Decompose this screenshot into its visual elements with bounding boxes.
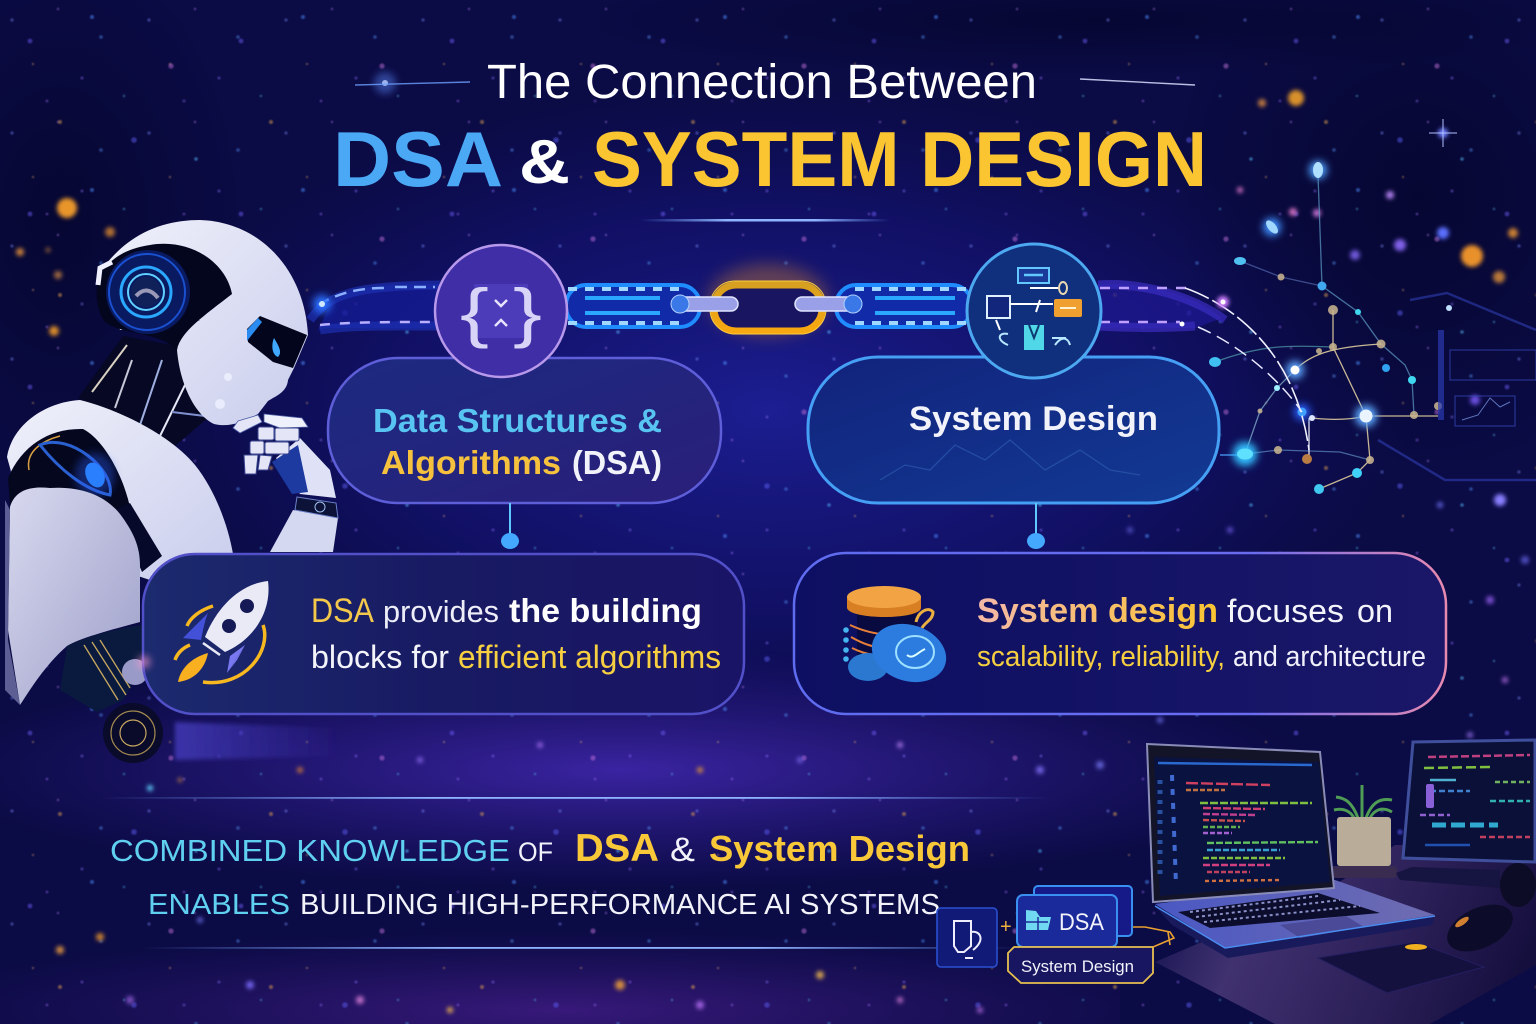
summary line 2: BUILDING HIGH-PERFORMANCE AI SYSTEMS [300, 889, 940, 921]
mini card: back card [1034, 886, 1132, 936]
mini card: System Design: System Design [1021, 957, 1134, 976]
title SYSTEM DESIGN: SYSTEM DESIGN [592, 115, 1207, 203]
summary text [110, 827, 970, 921]
DSA description line 2: efficient algorithms [458, 639, 721, 675]
desk and laptop scene [1147, 740, 1536, 1024]
DSA description line 1: the building [509, 592, 702, 629]
laptop screen [1147, 744, 1334, 902]
DSA description line 1 [311, 592, 702, 630]
DSA description line 2: blocks for [311, 639, 449, 675]
mini card: System Design [1008, 947, 1153, 983]
System Design description line 2: scalability, reliability, [977, 641, 1225, 673]
robot upper arm [8, 488, 140, 705]
second monitor [1396, 740, 1535, 888]
mini card: DSA [1017, 895, 1117, 947]
System Design label: System Design [909, 400, 1158, 438]
robot forearm [270, 510, 338, 552]
robot neck [78, 336, 210, 452]
robot [5, 220, 340, 763]
connector: System Design [1027, 503, 1045, 549]
panel: Data Structures and Algorithms [328, 358, 721, 503]
title ampersand: & [519, 128, 570, 197]
robot head [97, 220, 308, 425]
title DSA: DSA [333, 115, 503, 203]
chain: gold centre link [671, 264, 862, 336]
panel: System Design [808, 357, 1219, 503]
mouse [1440, 895, 1520, 961]
summary line 1: COMBINED KNOWLEDGE [110, 833, 510, 868]
System Design description line 1: on [1357, 593, 1393, 629]
robot upper torso [7, 400, 233, 580]
System Design description line 2 [977, 641, 1426, 673]
mousepad [1318, 942, 1484, 993]
chain: right blue link [836, 285, 972, 327]
laptop base [1155, 880, 1435, 958]
bottom divider lines [100, 797, 1050, 949]
robot shoulder joint [8, 429, 130, 516]
DSA label line 2 [381, 444, 662, 481]
robot eye rings [98, 250, 190, 334]
panel: DSA description [138, 554, 744, 714]
DSA description line 1: provides [383, 594, 499, 629]
System Design description line 1 [977, 592, 1393, 630]
summary line 1: System Design [709, 828, 970, 869]
mini card: DSA: DSA [1059, 909, 1104, 936]
chain: right purple strand [1098, 284, 1309, 450]
plant [1331, 785, 1397, 878]
summary line 2: ENABLES [148, 889, 290, 921]
desk [1155, 845, 1536, 1024]
summary line 1 [110, 827, 970, 870]
summary line 1: DSA [575, 827, 659, 870]
title line 1: The Connection Between [487, 56, 1037, 109]
icon: database and coins [843, 586, 954, 691]
chain: left purple strand [310, 284, 440, 335]
mini card: cup icon [937, 908, 997, 967]
icon: curly braces circle [435, 245, 567, 377]
robot black arm gap [116, 503, 162, 572]
icon: system diagram circle [967, 244, 1101, 378]
chain: left blue link [566, 285, 700, 327]
mini card: plus connector: + [1000, 916, 1012, 938]
mini card: gold link [1133, 927, 1174, 947]
summary line 1: OF [518, 837, 553, 867]
robot ear module [97, 244, 232, 350]
robot forearm base [175, 722, 340, 760]
System Design description line 2: and architecture [1233, 641, 1426, 673]
DSA description line 1: DSA [311, 592, 374, 630]
icon: curly braces circle: { } [460, 275, 542, 349]
DSA label line 1: Data Structures & [373, 402, 662, 439]
System Design description line 1: focuses [1227, 593, 1344, 629]
summary line 1: & [670, 831, 695, 869]
System Design description line 1: System design [977, 592, 1218, 630]
connector: DSA [501, 503, 519, 549]
title [333, 56, 1207, 203]
DSA label line 2: Algorithms [381, 444, 561, 481]
DSA description line 2 [311, 639, 721, 675]
network constellation [1209, 161, 1536, 494]
robot elbow [60, 625, 163, 763]
icon: rocket [175, 581, 269, 683]
panel: System Design description [794, 553, 1446, 714]
dark object on desk [1500, 863, 1536, 907]
robot hand [233, 414, 338, 518]
mini cards: DSA and System Design [937, 886, 1174, 983]
robot visor [247, 316, 307, 368]
DSA label line 2: (DSA) [572, 444, 662, 481]
